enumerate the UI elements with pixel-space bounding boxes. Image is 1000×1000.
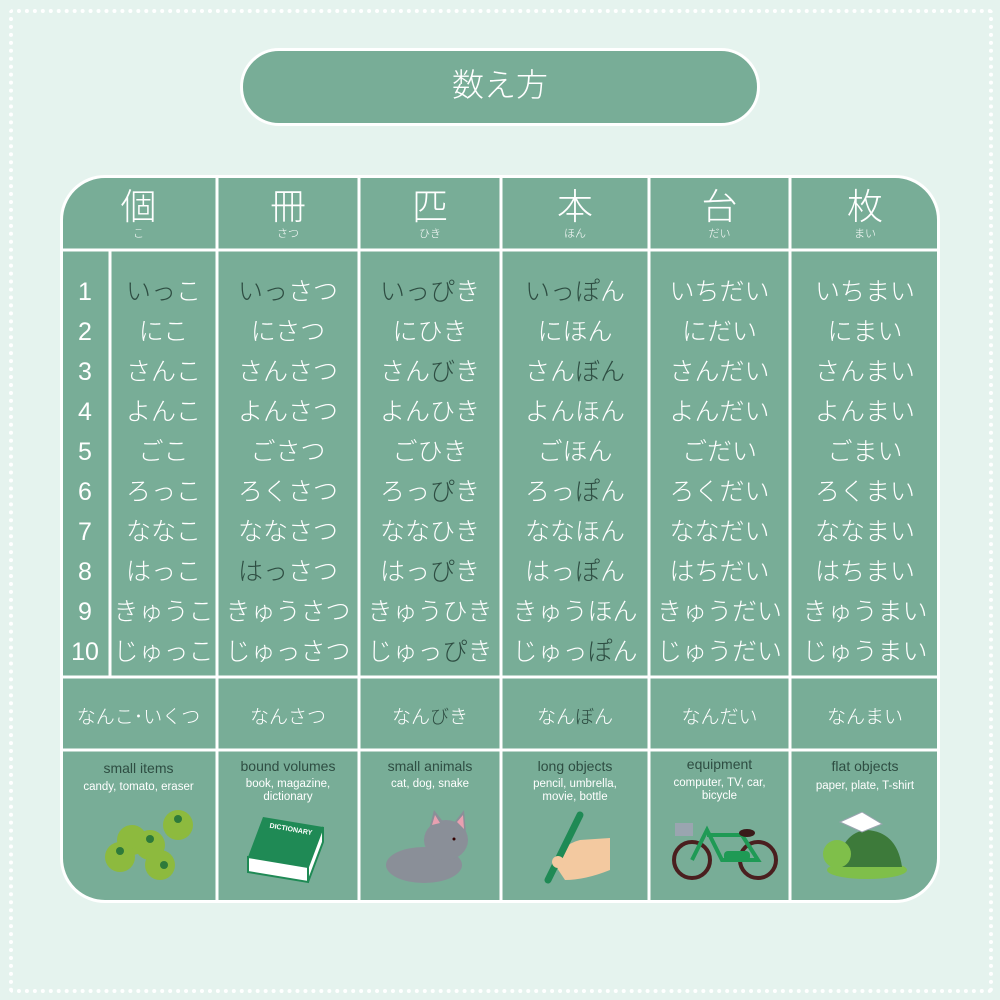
numbers column: 4 bbox=[78, 398, 92, 426]
column: 匹 readings: いっぴき bbox=[380, 278, 480, 306]
column: 匹 readings: はっぴき bbox=[380, 558, 480, 586]
category captions: computer, TV, car, bbox=[673, 777, 766, 789]
header: 冊: 冊 bbox=[270, 186, 306, 227]
column: 本 readings: ろっぽん bbox=[525, 478, 625, 506]
column: 台 readings: はちだい bbox=[669, 558, 770, 586]
column: 匹 readings: さんびき bbox=[380, 358, 480, 386]
column: 本 readings: ななほん bbox=[525, 518, 625, 546]
column: 枚 readings: よんまい bbox=[815, 398, 915, 426]
column: 個 readings bbox=[113, 278, 214, 666]
header: 枚: 枚 bbox=[847, 186, 883, 227]
panel: table bbox=[60, 175, 940, 903]
column: 枚 readings: はちまい bbox=[815, 558, 915, 586]
category captions: dictionary bbox=[263, 791, 313, 803]
numbers column: 2 bbox=[78, 318, 92, 346]
column: 本 readings: ごほん bbox=[537, 438, 612, 466]
title pill: 数え方 bbox=[452, 67, 548, 103]
column: 匹 readings: きゅうひき bbox=[367, 598, 492, 626]
numbers column: 1 bbox=[78, 278, 92, 306]
category captions: movie, bottle bbox=[542, 791, 608, 803]
column: 台 readings: さんだい bbox=[669, 358, 770, 386]
column: 匹 readings: ごひき bbox=[392, 438, 468, 466]
header: 台: だい bbox=[708, 228, 730, 240]
column: 個 readings: にこ bbox=[139, 318, 188, 346]
column: 冊 readings: はっさつ bbox=[238, 558, 338, 586]
column: 匹 readings bbox=[367, 278, 493, 666]
category captions: cat, dog, snake bbox=[391, 778, 469, 790]
column: 冊 readings: ななさつ bbox=[238, 518, 338, 546]
column: 冊 readings: ろくさつ bbox=[238, 478, 338, 506]
category captions bbox=[83, 756, 914, 803]
column: 本 readings: さんぼん bbox=[525, 358, 625, 386]
column: 個 readings: じゅっこ bbox=[113, 638, 214, 666]
column: 匹 readings: ろっぴき bbox=[380, 478, 480, 506]
column: 冊 readings: にさつ bbox=[251, 318, 325, 346]
column: 冊 readings: さんさつ bbox=[238, 358, 338, 386]
numbers column: 5 bbox=[78, 438, 92, 466]
category captions: equipment bbox=[687, 756, 752, 772]
column: 匹 readings: にひき bbox=[392, 318, 468, 346]
numbers column: 10 bbox=[71, 638, 99, 666]
question row: なんこ･いくつ bbox=[77, 707, 200, 728]
header row bbox=[120, 186, 883, 240]
icon: tomatoes bbox=[105, 810, 193, 880]
column: 冊 readings bbox=[225, 278, 350, 666]
question row: なんびき bbox=[392, 707, 468, 728]
column: 個 readings: はっこ bbox=[126, 558, 201, 586]
column: 枚 readings: じゅうまい bbox=[802, 638, 928, 666]
category captions: bicycle bbox=[702, 790, 737, 802]
column: 匹 readings: よんひき bbox=[380, 398, 480, 426]
category captions: bound volumes bbox=[241, 758, 335, 774]
numbers column: 3 bbox=[78, 358, 92, 386]
category captions: flat objects bbox=[832, 758, 898, 774]
category captions: pencil, umbrella, bbox=[533, 778, 617, 790]
column: 台 readings: よんだい bbox=[669, 398, 770, 426]
column: 台 readings: ななだい bbox=[669, 518, 770, 546]
column: 本 readings bbox=[512, 278, 638, 666]
column: 台 readings: ごだい bbox=[682, 438, 757, 466]
question row: なんぼん bbox=[537, 707, 613, 728]
column: 個 readings: きゅうこ bbox=[113, 598, 214, 626]
column: 枚 readings: ろくまい bbox=[815, 478, 915, 506]
header: 本: 本 bbox=[557, 186, 593, 227]
column: 本 readings: はっぽん bbox=[525, 558, 625, 586]
numbers column bbox=[71, 278, 99, 666]
column: 枚 readings: いちまい bbox=[815, 278, 915, 306]
header: 匹: 匹 bbox=[412, 186, 448, 227]
column: 個 readings: よんこ bbox=[126, 398, 201, 426]
category captions: long objects bbox=[538, 758, 612, 774]
column: 台 readings: にだい bbox=[682, 318, 757, 346]
category captions: candy, tomato, eraser bbox=[83, 781, 194, 793]
numbers column: 9 bbox=[78, 598, 92, 626]
column: 冊 readings: よんさつ bbox=[238, 398, 338, 426]
icon: dictionary: DICTIONARY bbox=[269, 823, 313, 837]
column: 個 readings: いっこ bbox=[126, 278, 201, 306]
icon: dictionary bbox=[247, 817, 324, 884]
column: 枚 readings: さんまい bbox=[815, 358, 915, 386]
header: 本: ほん bbox=[564, 228, 586, 240]
column: 冊 readings: きゅうさつ bbox=[225, 598, 350, 626]
column: 冊 readings: じゅっさつ bbox=[225, 638, 350, 666]
column: 枚 readings: ごまい bbox=[827, 438, 902, 466]
column: 個 readings: さんこ bbox=[126, 358, 201, 386]
category captions: small items bbox=[103, 760, 174, 776]
column: 冊 readings: いっさつ bbox=[238, 278, 338, 306]
title pill bbox=[240, 48, 760, 126]
column: 台 readings bbox=[657, 278, 782, 666]
numbers column: 8 bbox=[78, 558, 92, 586]
column: 本 readings: じゅっぽん bbox=[512, 638, 638, 666]
icon: hand with pencil bbox=[544, 812, 610, 884]
question row: なんだい bbox=[681, 707, 758, 728]
column: 冊 readings: ごさつ bbox=[250, 438, 326, 466]
column: 本 readings: よんほん bbox=[525, 398, 625, 426]
column: 台 readings: ろくだい bbox=[669, 478, 770, 506]
category captions: small animals bbox=[388, 758, 472, 774]
header: 個: こ bbox=[133, 228, 144, 240]
header: 匹: ひき bbox=[419, 228, 441, 240]
header: 枚: まい bbox=[854, 228, 876, 240]
header: 台: 台 bbox=[701, 186, 738, 227]
column: 枚 readings: きゅうまい bbox=[802, 598, 928, 626]
category captions: paper, plate, T-shirt bbox=[816, 780, 914, 792]
column: 枚 readings: ななまい bbox=[815, 518, 915, 546]
column: 枚 readings bbox=[802, 278, 928, 666]
icon: cat bbox=[386, 810, 468, 883]
question row: なんさつ bbox=[250, 707, 326, 728]
numbers column: 7 bbox=[78, 518, 92, 546]
question row bbox=[77, 707, 903, 728]
column: 本 readings: にほん bbox=[537, 318, 612, 346]
icon: turtle with letter bbox=[823, 812, 907, 879]
column: 枚 readings: にまい bbox=[827, 318, 902, 346]
column: 個 readings: ななこ bbox=[126, 518, 201, 546]
column: 本 readings: きゅうほん bbox=[512, 598, 638, 626]
column: 個 readings: ろっこ bbox=[126, 478, 201, 506]
column: 個 readings: ごこ bbox=[138, 438, 188, 466]
question row: なんまい bbox=[827, 707, 903, 728]
column: 台 readings: いちだい bbox=[669, 278, 770, 306]
column: 匹 readings: ななひき bbox=[380, 518, 480, 546]
header: 個: 個 bbox=[120, 186, 156, 227]
icon: bicycle bbox=[672, 823, 778, 880]
column: 台 readings: じゅうだい bbox=[657, 638, 782, 666]
column: 匹 readings: じゅっぴき bbox=[367, 638, 493, 666]
column: 本 readings: いっぽん bbox=[525, 278, 625, 306]
category captions: book, magazine, bbox=[246, 778, 330, 790]
numbers column: 6 bbox=[78, 478, 92, 506]
column: 台 readings: きゅうだい bbox=[657, 598, 782, 626]
header: 冊: さつ bbox=[277, 228, 299, 240]
